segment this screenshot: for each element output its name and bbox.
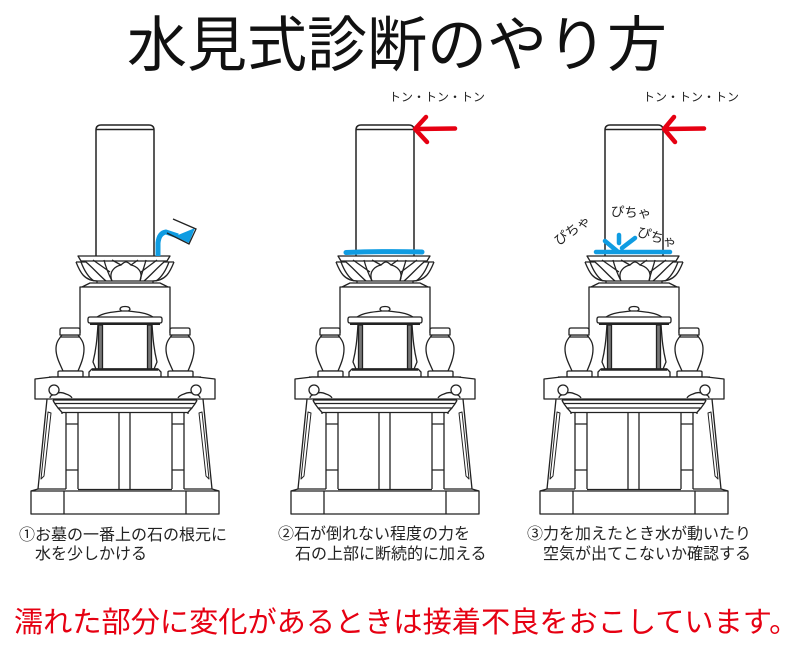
caption: step 1: ①お墓の一番上の石の根元に [19, 526, 227, 544]
caption: step 3: ③力を加えたとき水が動いたり [527, 525, 751, 543]
caption: step 3: 空気が出てこないか確認する [543, 545, 751, 563]
arrow: red tapping arrow [415, 117, 455, 142]
caption: step 2: ②石が倒れない程度の力を [278, 525, 470, 543]
illustration: gravestone 1 [31, 125, 219, 514]
label: splash sound right: ぴちゃ [635, 224, 678, 251]
conclusion note: 濡れた部分に変化があるときは接着不良をおこしています。 [14, 606, 798, 639]
panel: step 3 watch water [527, 90, 751, 563]
illustration: gravestone 2 [291, 125, 479, 514]
title: 水見式診断のやり方 [127, 12, 667, 79]
label: tapping sound: トン・トン・トン [643, 90, 739, 104]
label: splash sound top: ぴちゃ [610, 204, 652, 221]
caption: step 3 [527, 525, 751, 563]
panel: step 1 pour water [19, 125, 227, 563]
caption: step 2 [278, 525, 487, 563]
label: tapping sound: トン・トン・トン [389, 90, 485, 104]
illustration: gravestone 3 [540, 125, 728, 514]
icon: water pitcher pouring [158, 219, 196, 256]
arrow: red tapping arrow [664, 117, 704, 142]
water line [346, 249, 422, 255]
panel: step 2 tap stone [278, 90, 487, 563]
water splash [596, 235, 670, 252]
caption: step 1: 水を少しかける [35, 545, 147, 563]
caption: step 1 [19, 526, 227, 563]
caption: step 2: 石の上部に断続的に加える [295, 545, 487, 563]
label: splash sound left: ぴちゃ [551, 213, 593, 248]
